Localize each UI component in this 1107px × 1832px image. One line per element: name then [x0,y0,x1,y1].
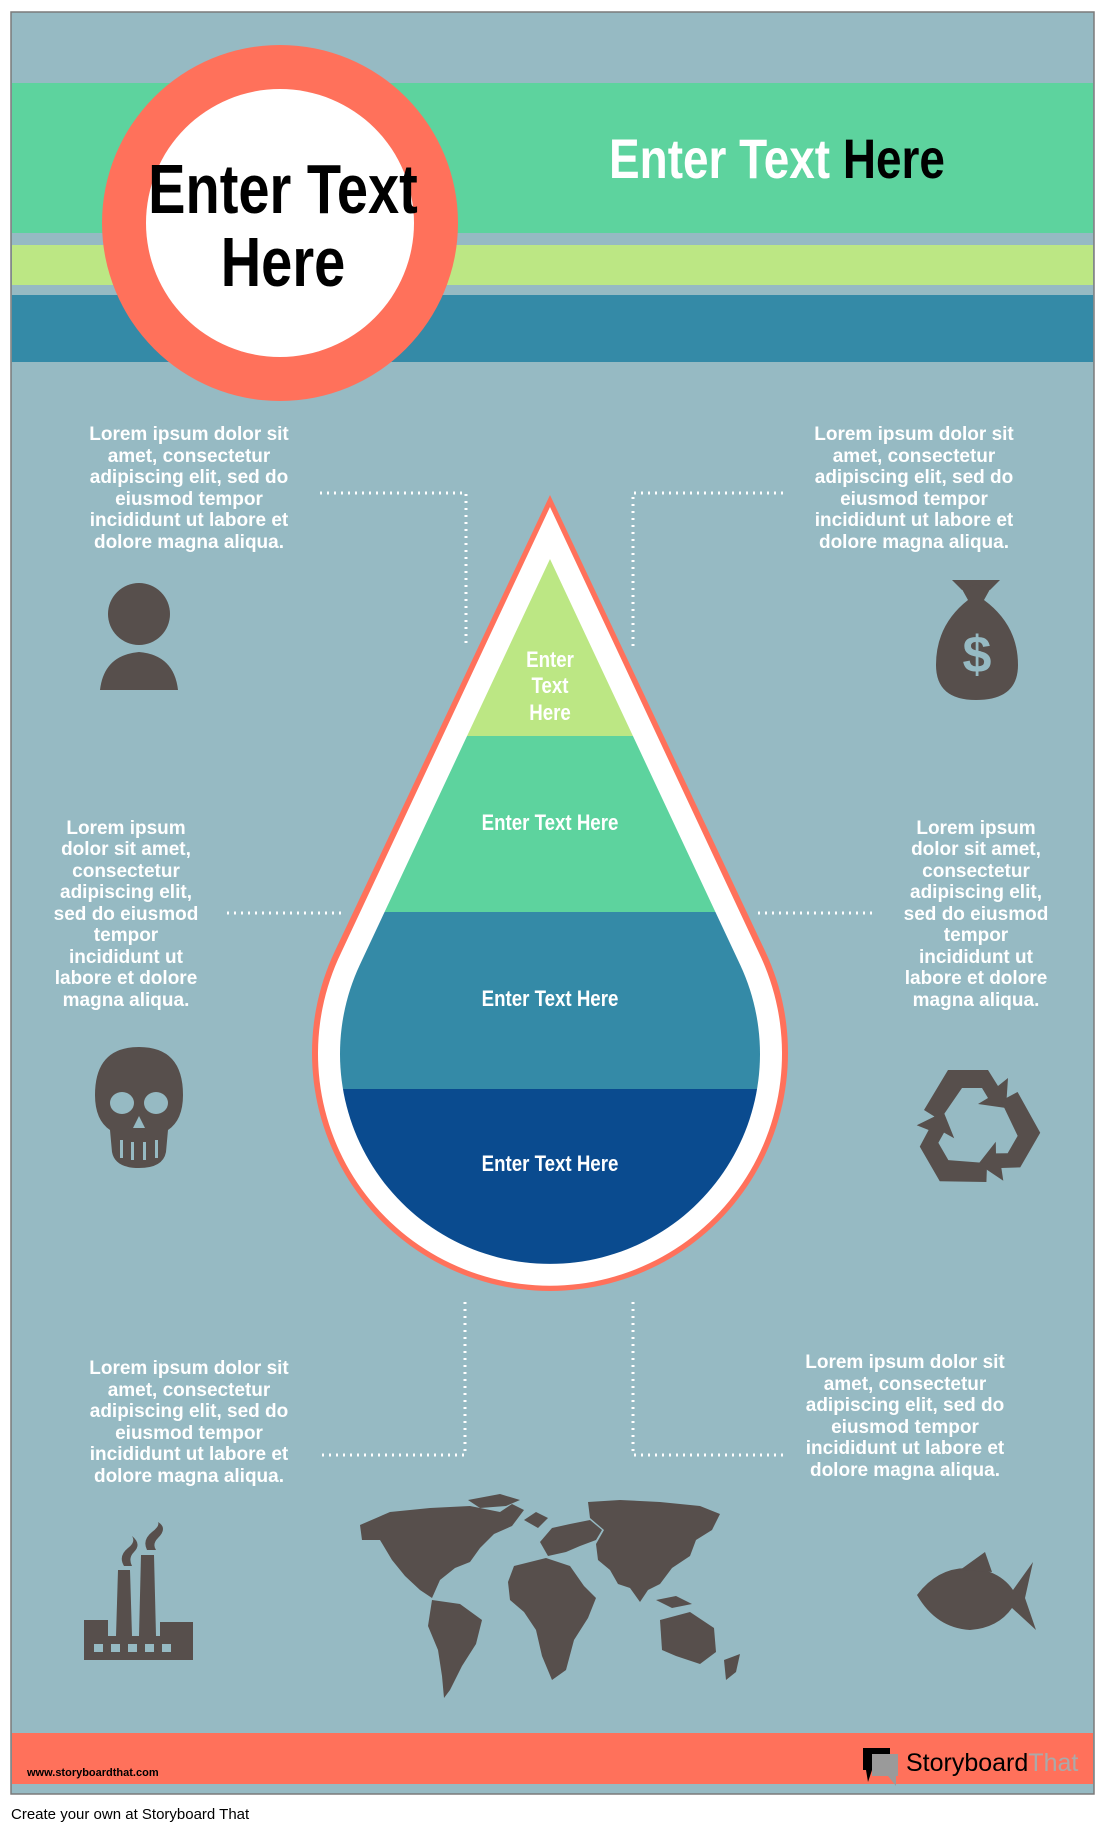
text block: top right: adipiscing elit, sed do [815,467,1013,488]
header title: Enter Text Here [609,128,945,190]
layer 2 [384,736,716,912]
text block: bottom left: eiusmod tempor [115,1423,263,1444]
layer labels: Here [529,702,571,725]
icon: factory [84,1522,193,1660]
footer band [12,1733,1093,1784]
badge text: Enter Text [148,151,418,228]
footer logo [863,1748,1078,1786]
text block: middle right: labore et dolore [905,968,1047,989]
text block: middle right: sed do eiusmod [904,904,1048,925]
text block: top right: eiusmod tempor [840,489,988,510]
text block: middle right: magna aliqua. [913,990,1039,1011]
icon: money bag [936,580,1018,700]
text block: middle left: magna aliqua. [63,990,189,1011]
text block: bottom right: adipiscing elit, sed do [806,1395,1004,1416]
text block: top left: eiusmod tempor [115,489,263,510]
text block: top right [814,424,1014,553]
text block: top left: amet, consectetur [108,446,271,467]
text block: bottom right: Lorem ipsum dolor sit [805,1352,1005,1373]
layer labels: Enter Text Here [482,988,618,1011]
text block: bottom left: incididunt ut labore et [90,1444,289,1465]
text block: bottom left [89,1358,289,1487]
text block: top right: dolore magna aliqua. [819,532,1009,553]
text block: top left: dolore magna aliqua. [94,532,284,553]
layer labels: Enter Text Here [482,1153,618,1176]
bottom caption: Create your own at Storyboard That [11,1806,250,1823]
text block: middle left [54,818,198,1011]
text block: middle left: dolor sit amet, [61,839,191,860]
badge text: Here [221,224,345,301]
text block: middle right: tempor [944,925,1009,946]
text block: middle right: consectetur [922,861,1030,882]
lime band [12,245,1093,285]
text block: middle left: incididunt ut [69,947,184,968]
text block: top right: Lorem ipsum dolor sit [814,424,1014,445]
water drop pyramid [300,495,800,1291]
footer url: www.storyboardthat.com [26,1767,159,1779]
text block: bottom left: adipiscing elit, sed do [90,1401,288,1422]
text block: bottom left: amet, consectetur [108,1380,271,1401]
dotted connectors [227,493,874,1455]
text block: middle right: incididunt ut [919,947,1034,968]
layer 4 [343,1089,757,1264]
icon: person [100,583,178,690]
layer 1 [467,559,633,736]
text block: bottom right: eiusmod tempor [831,1417,979,1438]
text block: top right: incididunt ut labore et [815,510,1014,531]
text block: middle left: labore et dolore [55,968,197,989]
text block: top left [89,424,289,553]
footer logo: StoryboardThat [906,1749,1078,1777]
text block: bottom right: amet, consectetur [824,1374,987,1395]
text block: top left: Lorem ipsum dolor sit [89,424,289,445]
layer labels: Text [531,675,569,698]
text block: top left: incididunt ut labore et [90,510,289,531]
text block: bottom left: Lorem ipsum dolor sit [89,1358,289,1379]
text block: middle left: consectetur [72,861,180,882]
text block: bottom right: incididunt ut labore et [806,1438,1005,1459]
text block: bottom left: dolore magna aliqua. [94,1466,284,1487]
text block: middle right [904,818,1048,1011]
layer labels: Enter Text Here [482,812,618,835]
text block: middle right: Lorem ipsum [916,818,1036,839]
layer 3 [340,912,760,1089]
layer labels: Enter [526,649,574,672]
text block: middle left: Lorem ipsum [66,818,186,839]
text block: top right: amet, consectetur [833,446,996,467]
text block: middle left: sed do eiusmod [54,904,198,925]
green band [12,83,1093,233]
text block: middle left: tempor [94,925,159,946]
circle badge [102,45,458,401]
text block: bottom right: dolore magna aliqua. [810,1460,1000,1481]
icon: recycle [910,1070,1052,1202]
layer labels [482,649,618,1176]
text block: bottom right [805,1352,1005,1481]
text block: middle right: adipiscing elit, [910,882,1042,903]
icon: world map [360,1494,740,1698]
icon: fish [917,1552,1036,1630]
icon: money bag: $ [963,626,992,684]
text block: top left: adipiscing elit, sed do [90,467,288,488]
icon: skull [95,1047,183,1168]
teal band [12,295,1093,362]
text block: middle left: adipiscing elit, [60,882,192,903]
text block: middle right: dolor sit amet, [911,839,1041,860]
